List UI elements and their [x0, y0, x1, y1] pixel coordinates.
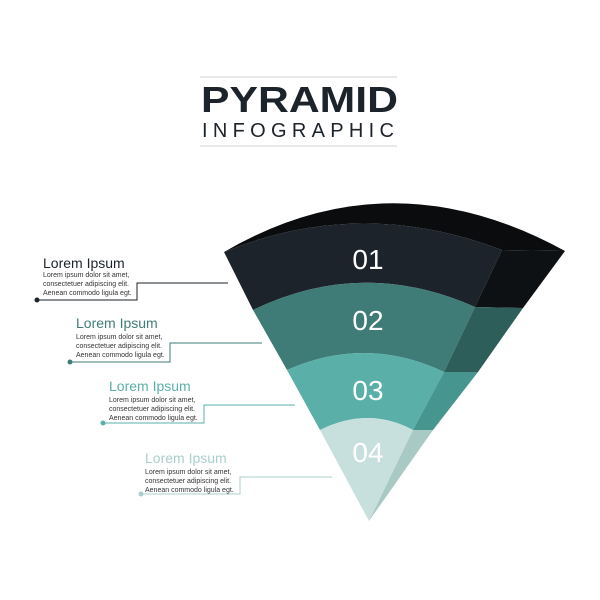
title: [201, 79, 398, 142]
band 4: 04: [352, 437, 384, 468]
label 4: [138, 450, 332, 496]
band 4: [320, 418, 433, 521]
label 2: Aenean commodo ligula egt.: [76, 352, 165, 359]
band 1: 01: [352, 244, 384, 275]
label 1: [34, 255, 228, 302]
band 3: [287, 353, 478, 430]
label 3: Lorem Ipsum: [109, 378, 191, 394]
label 4: Lorem ipsum dolor sit amet,: [145, 469, 231, 476]
band 2: 02: [352, 305, 384, 336]
label 2: Lorem Ipsum: [76, 315, 158, 331]
label 1: Lorem Ipsum: [43, 255, 125, 271]
label 3: [100, 378, 295, 426]
label 3: Aenean commodo ligula egt.: [109, 415, 198, 422]
label 4: consectetuer adipiscing elit.: [145, 478, 231, 485]
band 1: [224, 223, 565, 310]
pyramid cone: [224, 203, 565, 521]
label 1: Aenean commodo ligula egt.: [43, 290, 132, 297]
label 2: [68, 315, 262, 364]
band 2: [253, 283, 523, 372]
label 2: consectetuer adipiscing elit.: [76, 343, 162, 350]
label 1: consectetuer adipiscing elit.: [43, 281, 129, 288]
label 3: Lorem ipsum dolor sit amet,: [109, 397, 195, 404]
band 3: 03: [352, 375, 384, 406]
label 4: Aenean commodo ligula egt.: [145, 487, 234, 494]
title: INFOGRAPHIC: [202, 120, 394, 142]
label 2: Lorem ipsum dolor sit amet,: [76, 334, 162, 341]
label 3: consectetuer adipiscing elit.: [109, 406, 195, 413]
label 1: Lorem ipsum dolor sit amet,: [43, 272, 129, 279]
title: PYRAMID: [201, 79, 398, 120]
label 4: Lorem Ipsum: [145, 450, 227, 466]
top surface: [224, 203, 565, 252]
